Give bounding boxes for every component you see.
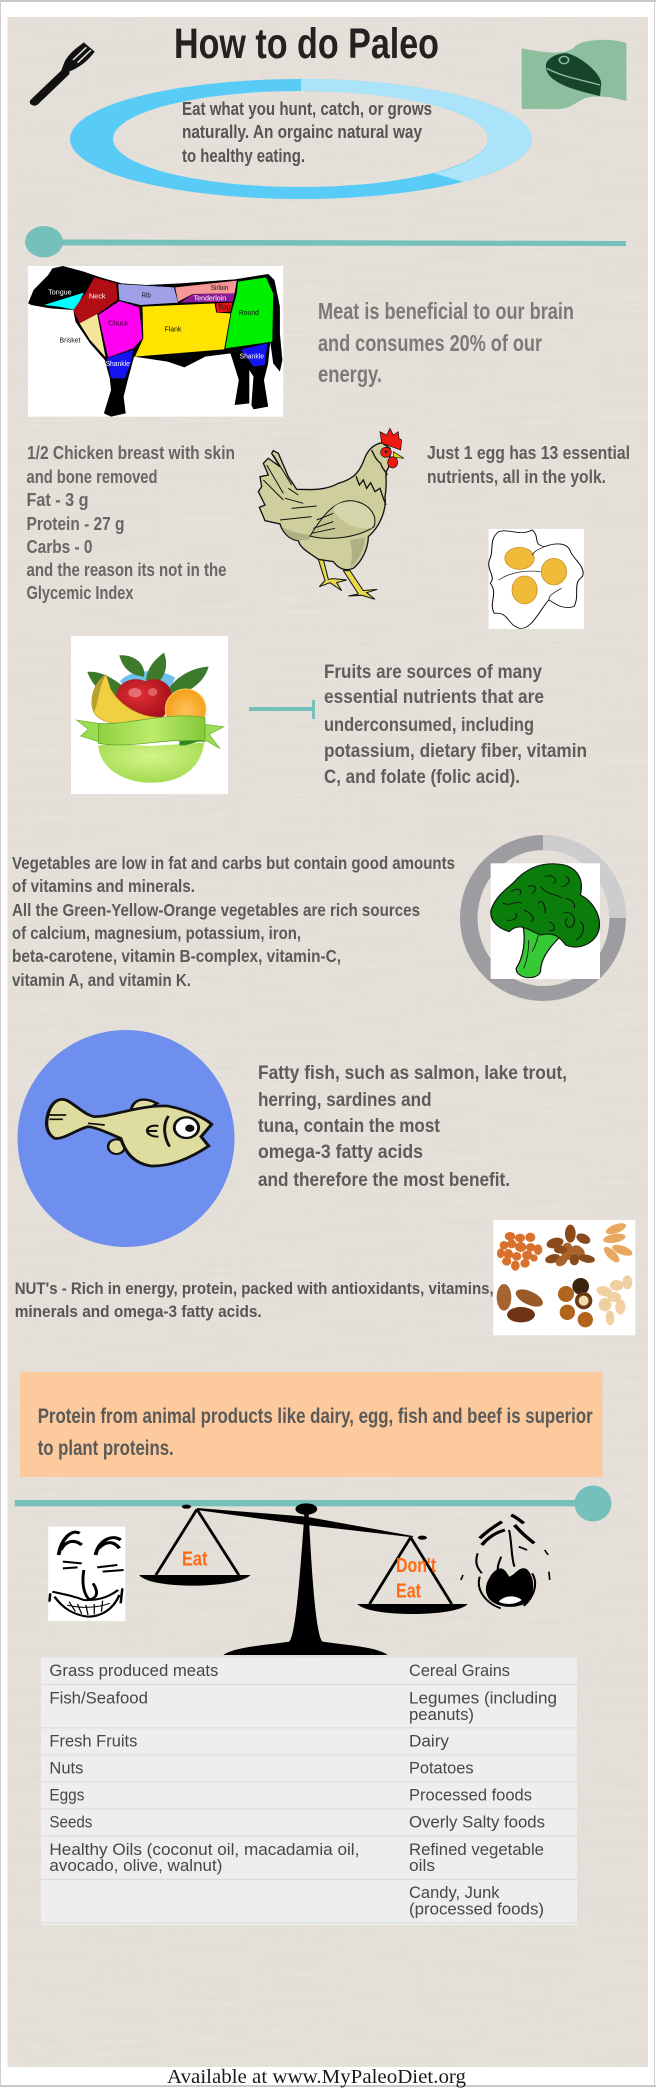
table column: don't eat: (processed foods) <box>409 1900 544 1919</box>
text block: fatty fish: tuna, contain the most <box>258 1115 440 1137</box>
icon: balance scale <box>139 1503 468 1655</box>
text block: meat: Meat is beneficial to our brain <box>318 298 574 324</box>
icon: happy face <box>48 1527 125 1621</box>
table column: eat: Seeds <box>49 1813 92 1832</box>
text block: nuts <box>15 1280 494 1321</box>
table column: don't eat: Potatoes <box>409 1759 474 1778</box>
text block: egg fact: nutrients, all in the yolk. <box>427 467 606 487</box>
text block: fatty fish: omega-3 fatty acids <box>258 1141 423 1163</box>
table column: eat: Healthy Oils (coconut oil, macadamia oil, <box>49 1840 359 1859</box>
table column: don't eat: Dairy <box>409 1732 450 1751</box>
image: beef cuts cow: Rib <box>142 291 151 299</box>
text block: nuts: NUT's - Rich in energy, protein, packed with antioxidants, vitamins, <box>15 1280 494 1298</box>
title: How to do Paleo <box>174 20 439 68</box>
label: don't eat: Don't <box>396 1555 436 1577</box>
icon: fish <box>47 1099 212 1166</box>
text block: nuts: minerals and omega-3 fatty acids. <box>15 1303 262 1321</box>
table column: eat <box>49 1661 359 1875</box>
text block: vegetables: vitamin A, and vitamin K. <box>12 970 191 990</box>
image: fruit bowl <box>71 636 228 794</box>
text block: chicken breast nutrition: Protein - 27 g <box>26 514 124 534</box>
icon: fork <box>34 42 95 102</box>
text block: chicken breast nutrition: Carbs - 0 <box>26 537 92 557</box>
icon: meat on green flag <box>522 40 626 109</box>
table column: don't eat: Processed foods <box>409 1786 532 1805</box>
callout: protein: to plant proteins. <box>38 1437 174 1460</box>
table column: don't eat: Overly Salty foods <box>409 1813 545 1832</box>
text block: intro: Eat what you hunt, catch, or grows <box>182 99 432 119</box>
label: eat: Eat <box>182 1549 208 1571</box>
icon: crying face <box>461 1515 550 1608</box>
circle: fish backdrop <box>18 1030 234 1247</box>
text block: chicken breast nutrition <box>26 443 235 603</box>
text block: fruits: essential nutrients that are <box>324 686 544 708</box>
label: don't eat: Eat <box>396 1581 421 1603</box>
image: beef cuts cow: Round <box>239 308 259 317</box>
text block: vegetables: All the Green-Yellow-Orange vegetables are rich sources <box>12 900 420 920</box>
image: beef cuts cow: Top <box>217 302 231 311</box>
table: eat vs don't eat <box>41 1658 577 1925</box>
table column: don't eat: Refined vegetable <box>409 1840 544 1859</box>
text block: vegetables: beta-carotene, vitamin B-complex, vitamin-C, <box>12 946 341 966</box>
table column: don't eat: Candy, Junk <box>409 1883 500 1902</box>
table column: eat: Eggs <box>49 1786 84 1805</box>
arrow: fruit to text <box>249 700 315 719</box>
text block: meat <box>318 298 574 387</box>
text block: intro: naturally. An orgainc natural way <box>182 122 422 142</box>
text block: meat: energy. <box>318 361 382 387</box>
text block: fatty fish: herring, sardines and <box>258 1089 432 1111</box>
image: beef cuts cow: Flank <box>165 325 182 333</box>
text block: fruits <box>324 661 587 788</box>
table column: don't eat: Legumes (including <box>409 1688 557 1707</box>
callout: protein <box>20 1372 602 1477</box>
table column: don't eat: peanuts) <box>409 1705 474 1724</box>
text block: vegetables <box>12 853 455 990</box>
text block: vegetables: Vegetables are low in fat and carbs but contain good amounts <box>12 853 455 873</box>
text block: chicken breast nutrition: and the reason its not in the <box>26 560 226 580</box>
text block: chicken breast nutrition: Glycemic Index <box>26 583 134 603</box>
text block: intro <box>182 99 432 166</box>
label: don't eat <box>396 1555 436 1603</box>
image: beef cuts cow: Tenderloin <box>194 293 227 302</box>
icon: hen <box>258 428 404 599</box>
table column: eat: avocado, olive, walnut) <box>49 1856 222 1875</box>
chart: grey ring <box>460 835 626 1001</box>
text block: chicken breast nutrition: 1/2 Chicken breast with skin <box>27 443 235 463</box>
text block: vegetables: of calcium, magnesium, potassium, iron, <box>12 923 301 943</box>
text block: vegetables: of vitamins and minerals. <box>12 876 195 896</box>
image: assorted nuts <box>493 1220 635 1335</box>
table column: don't eat: Cereal Grains <box>409 1661 510 1680</box>
table column: don't eat <box>409 1661 557 1919</box>
text block: fatty fish: Fatty fish, such as salmon, lake trout, <box>258 1062 567 1084</box>
image: beef cuts cow: Sirloin <box>211 283 229 292</box>
text block: chicken breast nutrition: Fat - 3 g <box>26 490 88 510</box>
image: beef cuts cow: Brisket <box>59 335 81 344</box>
table column: eat: Nuts <box>49 1759 83 1778</box>
text block: egg fact: Just 1 egg has 13 essential <box>427 443 630 463</box>
text block: fruits: underconsumed, including <box>324 714 534 736</box>
image: beef cuts cow <box>28 266 283 417</box>
table column: eat: Fish/Seafood <box>49 1688 148 1707</box>
divider: teal line with dot <box>15 1486 611 1522</box>
divider: teal line with dot <box>25 226 626 257</box>
text block: intro: to healthy eating. <box>182 146 305 166</box>
image: beef cuts cow: Chuck <box>108 319 129 327</box>
table column: eat: Grass produced meats <box>49 1661 218 1680</box>
text block: fatty fish: and therefore the most benefit. <box>258 1169 510 1191</box>
image: beef cuts cow: Tongue <box>48 287 72 296</box>
table column: eat: Fresh Fruits <box>49 1732 137 1751</box>
text block: fruits: Fruits are sources of many <box>324 661 542 683</box>
text block: fruits: C, and folate (folic acid). <box>324 766 520 788</box>
text block: chicken breast nutrition: and bone removed <box>26 467 158 487</box>
text block: fruits: potassium, dietary fiber, vitamin <box>324 740 587 762</box>
text block: fatty fish <box>258 1062 567 1191</box>
image: beef cuts cow: Neck <box>89 292 106 300</box>
text block: egg fact <box>427 443 630 487</box>
image: beef cuts cow: Shankle <box>240 352 264 360</box>
image: fried eggs <box>489 529 584 629</box>
footer: source: Available at www.MyPaleoDiet.org <box>167 2066 466 2088</box>
image: beef cuts cow: Shankle <box>106 359 130 368</box>
text block: meat: and consumes 20% of our <box>318 330 542 356</box>
icon: broccoli <box>491 863 600 979</box>
chart: blue ellipse ring <box>70 79 532 199</box>
table column: don't eat: oils <box>409 1856 435 1875</box>
